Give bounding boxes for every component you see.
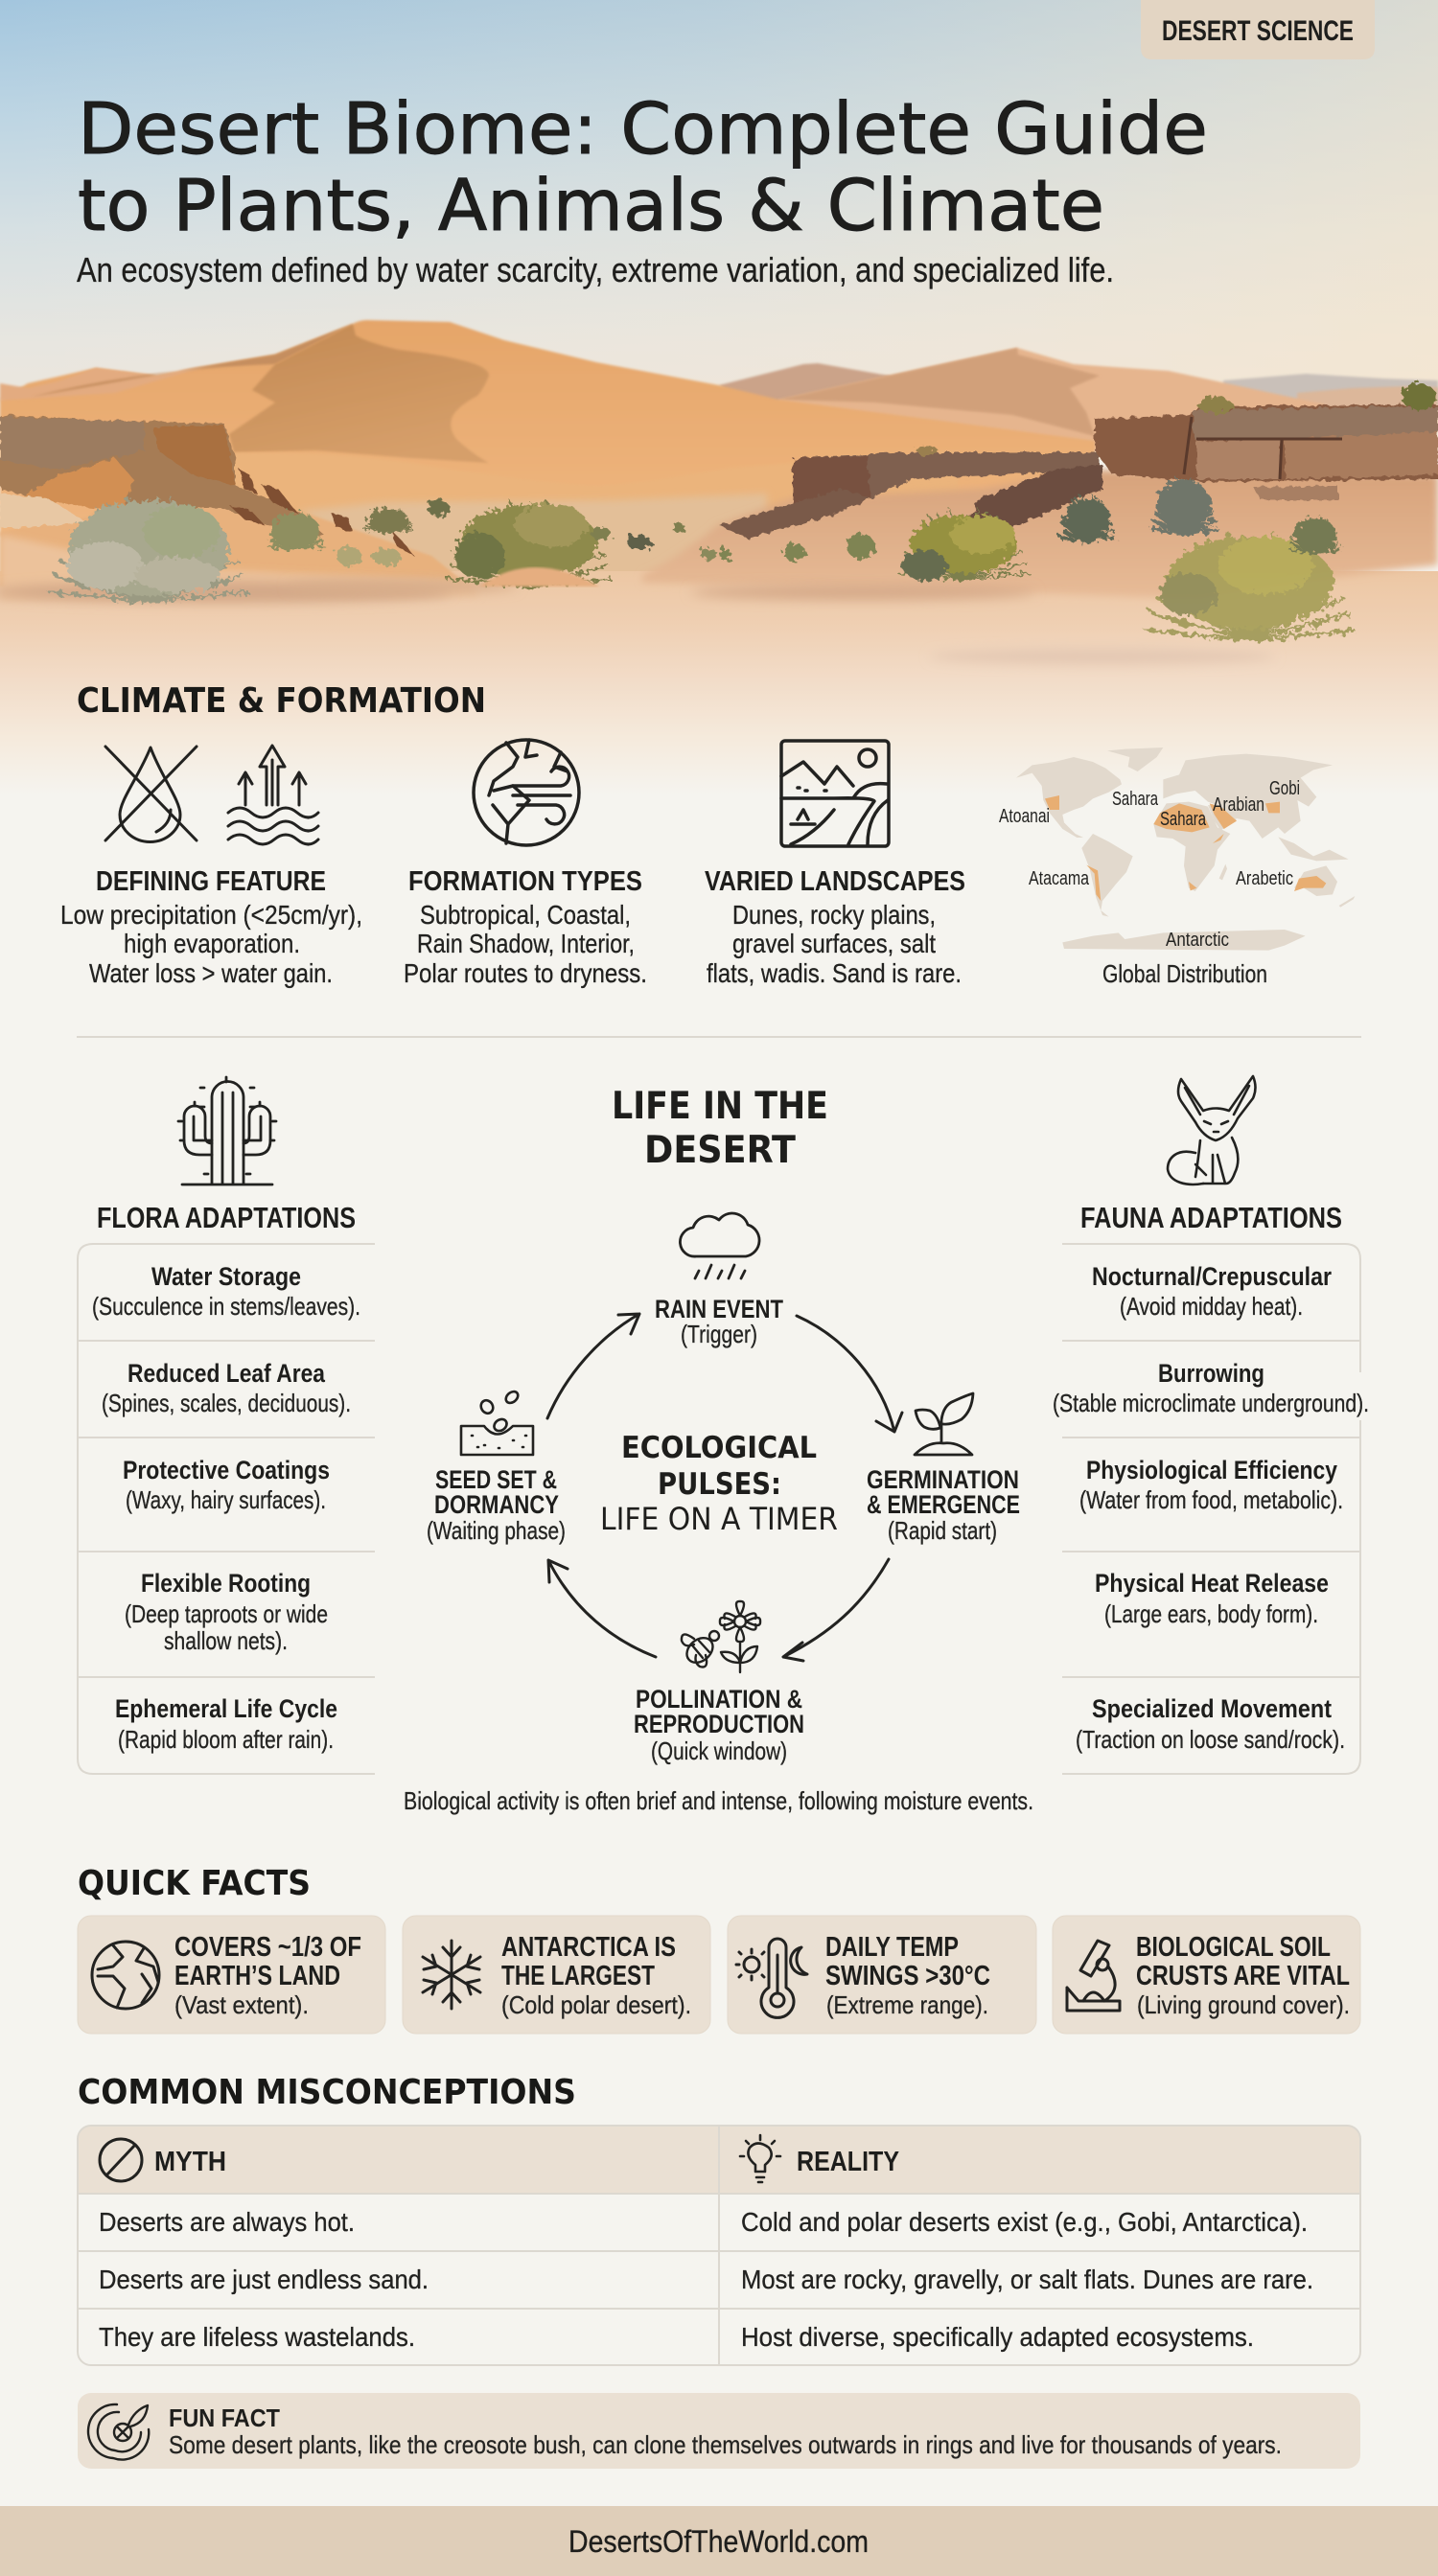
stage: rain event: (Trigger) [681,1320,757,1348]
world map: global distribution: Gobi [1269,778,1300,799]
row: water storage [92,1262,360,1321]
stage: germination and emergence: GERMINATION [867,1465,1019,1494]
row 3: They are lifeless wastelands. [99,2322,415,2352]
icon: snowflake [423,1941,480,2009]
caption: biological activity: Biological activity is often brief and intense, following moisture events. [404,1786,1033,1815]
quick fact card: antarctica [403,1916,710,2034]
row: nocturnal [1092,1262,1332,1321]
text: varied landscapes description: flats, wadis. Sand is rare. [707,958,962,988]
callout: fun fact: FUN FACT [169,2404,280,2432]
label: global distribution: Global Distribution [1102,959,1267,988]
stage: germination and emergence: (Rapid start) [888,1516,997,1545]
icon: evaporation arrows over waves [228,746,318,844]
row: protective coatings [123,1456,330,1514]
row: nocturnal: Nocturnal/Crepuscular [1092,1262,1332,1291]
stage: seed set and dormancy: DORMANCY [434,1490,559,1519]
world map: global distribution: Atacama [1029,868,1090,889]
table frame [1062,1244,1360,1774]
footer: DesertsOfTheWorld.com [568,2524,869,2559]
icon: ring-growing plant [88,2404,149,2460]
row: flexible rooting [125,1569,328,1655]
column: defining feature [60,746,362,988]
heading: life in the desert: DESERT [644,1129,796,1172]
row: specialized movement [1076,1694,1345,1754]
arrow: rain to germination [797,1316,902,1432]
row: physiological efficiency [1079,1456,1343,1514]
quick fact card: daily temperature: (Extreme range). [826,1990,988,2019]
icon: sprout [915,1393,973,1455]
quick fact card: antarctica: ANTARCTICA IS [501,1932,676,1963]
row 1: Cold and polar deserts exist (e.g., Gobi, Antarctica). [741,2207,1308,2237]
quick fact card: coverage: COVERS ~1/3 OF [174,1932,361,1963]
row: water storage: (Succulence in stems/leaves). [92,1292,360,1321]
world map: global distribution [999,748,1355,988]
header: myth: MYTH [154,2147,226,2177]
world map: global distribution: Atoanai [999,806,1050,827]
icon: thermometer with sun and moon [736,1939,807,2017]
row: physical heat release [1095,1569,1329,1628]
stage: germination and emergence [867,1393,1020,1545]
icon: globe with wind [474,740,579,845]
header: reality: REALITY [797,2147,899,2177]
row: nocturnal: (Avoid midday heat). [1120,1292,1303,1321]
quick fact card: coverage: (Vast extent). [174,1990,309,2019]
row 3 [99,2322,1254,2352]
panel: flora adaptations [78,1077,375,1774]
table: myth vs reality [78,2126,1360,2365]
world map: global distribution: Sahara [1160,809,1207,830]
row: flexible rooting: Flexible Rooting [141,1569,311,1598]
quick fact card: coverage [78,1916,385,2034]
stage: pollination and reproduction: (Quick window) [651,1736,787,1765]
icon: rain cloud [680,1213,759,1278]
heading: common misconceptions: COMMON MISCONCEPTIONS [78,2073,576,2112]
icon: fennec fox [1168,1076,1256,1184]
row 2 [99,2265,1313,2294]
row: physical heat release: Physical Heat Release [1095,1569,1329,1598]
icon: bee and flower [682,1601,760,1672]
row: specialized movement: Specialized Movement [1092,1694,1332,1723]
icon: framed landscape [781,741,889,846]
label: defining feature: DEFINING FEATURE [96,866,326,897]
heading: quick facts: QUICK FACTS [78,1864,311,1903]
arrow: seed to rain [547,1314,639,1418]
world map: global distribution: Antarctic [1166,930,1229,951]
icon: crossed-out water drop [105,747,197,841]
icon: seeds falling into soil [461,1390,533,1455]
text: varied landscapes description: Dunes, rocky plains, [732,900,936,930]
cycle diagram: ecological pulses [427,1213,1020,1765]
world map: global distribution: Arabetic [1236,868,1293,889]
row 1 [99,2207,1308,2237]
quick fact card: daily temperature: DAILY TEMP [825,1932,959,1963]
quick fact card: soil crusts [1053,1916,1360,2034]
callout: fun fact: Some desert plants, like the creosote bush, can clone themselves outwards in rings and live for thousands of years. [169,2430,1282,2459]
header: reality [740,2135,899,2182]
row: burrowing [1053,1359,1371,1420]
row: physiological efficiency: (Water from food, metabolic). [1079,1485,1343,1514]
column: formation types [404,740,647,988]
quick fact card: daily temperature: SWINGS >30°C [825,1961,990,1991]
row: reduced leaf area [102,1359,351,1417]
arrow: pollination to seed set [548,1560,656,1657]
quick fact card: coverage: EARTH’S LAND [174,1961,340,1991]
world map: global distribution: Sahara [1112,789,1159,810]
row: burrowing: (Stable microclimate underground). [1053,1389,1369,1417]
stage: pollination and reproduction: POLLINATION & [636,1685,802,1714]
title [78,88,1208,247]
label: varied landscapes: VARIED LANDSCAPES [705,866,965,897]
row: protective coatings: Protective Coatings [123,1456,330,1484]
quick fact card: daily temperature [728,1916,1036,2034]
text: defining feature description [60,900,362,988]
row 3: Host diverse, specifically adapted ecosystems. [741,2322,1254,2352]
heading: fauna adaptations: FAUNA ADAPTATIONS [1080,1201,1342,1234]
panel: fauna adaptations [1053,1076,1371,1774]
heading: flora adaptations: FLORA ADAPTATIONS [97,1201,356,1234]
footer [0,2506,1438,2576]
stage: seed set and dormancy [427,1390,566,1545]
row: ephemeral life cycle: Ephemeral Life Cycle [115,1694,337,1723]
badge: desert science [1141,0,1375,59]
text: defining feature description: Low precipitation (<25cm/yr), [60,900,362,930]
row: ephemeral life cycle [115,1694,337,1754]
quick fact card: soil crusts: CRUSTS ARE VITAL [1136,1961,1350,1991]
stage: pollination and reproduction: REPRODUCTION [634,1710,804,1738]
row 1: Deserts are always hot. [99,2207,355,2237]
subtitle: An ecosystem defined by water scarcity, extreme variation, and specialized life. [77,250,1114,289]
text: defining feature description: Water loss > water gain. [89,958,333,988]
stage: seed set and dormancy: (Waiting phase) [427,1516,566,1545]
heading: life in the desert [612,1085,828,1172]
quick fact card: soil crusts: (Living ground cover). [1137,1990,1350,2019]
stage: germination and emergence: & EMERGENCE [867,1490,1020,1519]
row: burrowing: Burrowing [1158,1359,1264,1388]
title: Desert Biome: Complete Guide [78,88,1208,171]
row: flexible rooting: shallow nets). [164,1626,288,1655]
header: myth [100,2139,226,2181]
center label: ecological pulses [600,1431,838,1537]
row: protective coatings: (Waxy, hairy surfaces). [126,1485,326,1514]
center label: ecological pulses: LIFE ON A TIMER [600,1501,838,1537]
icon: globe [92,1942,159,2009]
row: reduced leaf area: Reduced Leaf Area [128,1359,326,1388]
row: ephemeral life cycle: (Rapid bloom after rain). [118,1725,334,1754]
text: varied landscapes description: gravel surfaces, salt [732,929,936,958]
text: formation types description [404,900,647,988]
quick fact card: antarctica: THE LARGEST [501,1961,655,1991]
row 2: Deserts are just endless sand. [99,2265,429,2294]
quick fact card: soil crusts: BIOLOGICAL SOIL [1136,1932,1331,1963]
center label: ecological pulses: ECOLOGICAL [621,1431,817,1465]
badge: desert science: DESERT SCIENCE [1162,15,1354,47]
world map: global distribution: Arabian [1213,794,1264,816]
text: formation types description: Rain Shadow, Interior, [417,929,635,958]
hero desert landscape [0,0,1438,795]
row: physical heat release: (Large ears, body form). [1104,1599,1318,1628]
heading: climate and formation: CLIMATE & FORMATION [77,681,486,721]
column: varied landscapes [705,741,965,988]
table frame [78,1244,375,1774]
text: varied landscapes description [707,900,962,988]
stage: pollination and reproduction [634,1601,804,1765]
row 2: Most are rocky, gravelly, or salt flats. Dunes are rare. [741,2265,1313,2294]
text: defining feature description: high evaporation. [124,929,300,958]
text: formation types description: Polar routes to dryness. [404,958,647,988]
bushes [50,383,1436,640]
icon: microscope [1067,1941,1120,2011]
label: formation types: FORMATION TYPES [408,866,642,897]
stage: rain event: RAIN EVENT [655,1295,783,1323]
row: water storage: Water Storage [151,1262,301,1291]
callout: fun fact [78,2393,1360,2469]
row: specialized movement: (Traction on loose sand/rock). [1076,1725,1345,1754]
title: to Plants, Animals & Climate [78,165,1104,247]
heading: life in the desert: LIFE IN THE [612,1085,828,1128]
row: flexible rooting: (Deep taproots or wide [125,1599,328,1628]
stage: seed set and dormancy: SEED SET & [435,1465,557,1494]
stage: rain event [655,1213,783,1348]
icon: cactus [178,1077,276,1184]
text: formation types description: Subtropical, Coastal, [420,900,631,930]
row: physiological efficiency: Physiological Efficiency [1086,1456,1337,1484]
quick fact card: antarctica: (Cold polar desert). [501,1990,691,2019]
row: reduced leaf area: (Spines, scales, deciduous). [102,1389,351,1417]
arrow: germination to pollination [783,1559,889,1661]
center label: ecological pulses: PULSES: [658,1467,781,1502]
